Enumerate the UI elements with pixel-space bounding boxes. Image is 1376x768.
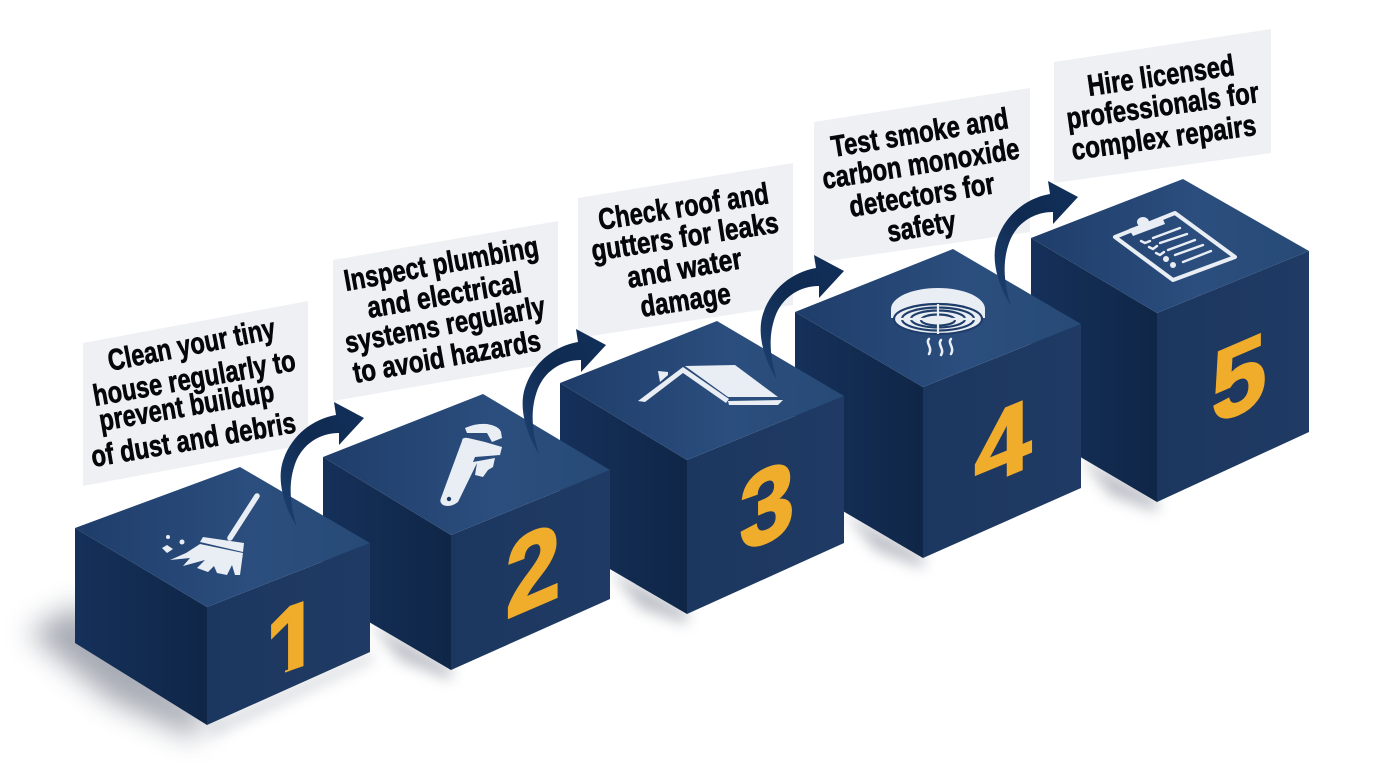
- panel: step 3 text: and water: [625, 242, 745, 295]
- block 4: [795, 249, 1081, 568]
- panel: step 4 text: [814, 88, 1030, 263]
- icon: smoke detector: [891, 288, 985, 355]
- panel: step 1 text: Clean your tiny: [105, 312, 278, 378]
- panel: step 5 text: complex repairs: [1069, 109, 1258, 167]
- panel: step 1 text: of dust and debris: [89, 406, 298, 474]
- panel: step 2 text: [333, 221, 558, 401]
- number 1: 1: [265, 573, 323, 713]
- panel: step 4 text: detectors for: [847, 167, 997, 224]
- panel: step 2 text: and electrical: [365, 266, 524, 325]
- arrow 2 to 3: [523, 329, 606, 454]
- icon: clipboard: [1115, 213, 1235, 280]
- number 3: 3: [740, 437, 794, 575]
- panel: step 4 text: Test smoke and: [829, 102, 1011, 164]
- panel: step 2 text: systems regularly: [342, 290, 548, 360]
- panel: step 1 text: prevent buildup: [97, 375, 277, 438]
- number 5: 5: [1212, 311, 1266, 447]
- block 5: [1031, 179, 1309, 512]
- panel: step 1 text: house regularly to: [90, 344, 298, 413]
- block 3: [560, 321, 844, 624]
- panel: step 3 text: Check roof and: [596, 177, 771, 237]
- icon: pipe wrench: [440, 424, 502, 506]
- panel: step 3 text: gutters for leaks: [589, 206, 781, 268]
- icon: broom: [162, 496, 257, 575]
- panel: step 2 text: Inspect plumbing: [341, 231, 541, 298]
- arrow 4 to 5: [995, 181, 1078, 306]
- panel: step 3 text: [578, 163, 793, 338]
- arrow 1 to 2: [281, 402, 364, 527]
- panel: step 4 text: safety: [885, 205, 958, 249]
- icon: roof: [638, 365, 783, 405]
- arrow 3 to 4: [761, 255, 844, 380]
- number 4: 4: [975, 378, 1031, 510]
- panel: step 4 text: carbon monoxide: [820, 133, 1022, 196]
- panel: step 2 text: to avoid hazards: [350, 324, 543, 390]
- panel: step 3 text: damage: [638, 277, 733, 324]
- panel: step 5 text: professionals for: [1064, 76, 1261, 136]
- panel: step 5 text: [1054, 29, 1271, 183]
- block 1: [28, 467, 375, 738]
- number 2: 2: [506, 498, 560, 642]
- block 2: [323, 394, 610, 680]
- panel: step 5 text: Hire licensed: [1085, 49, 1236, 103]
- panel: step 1 text: [83, 301, 308, 486]
